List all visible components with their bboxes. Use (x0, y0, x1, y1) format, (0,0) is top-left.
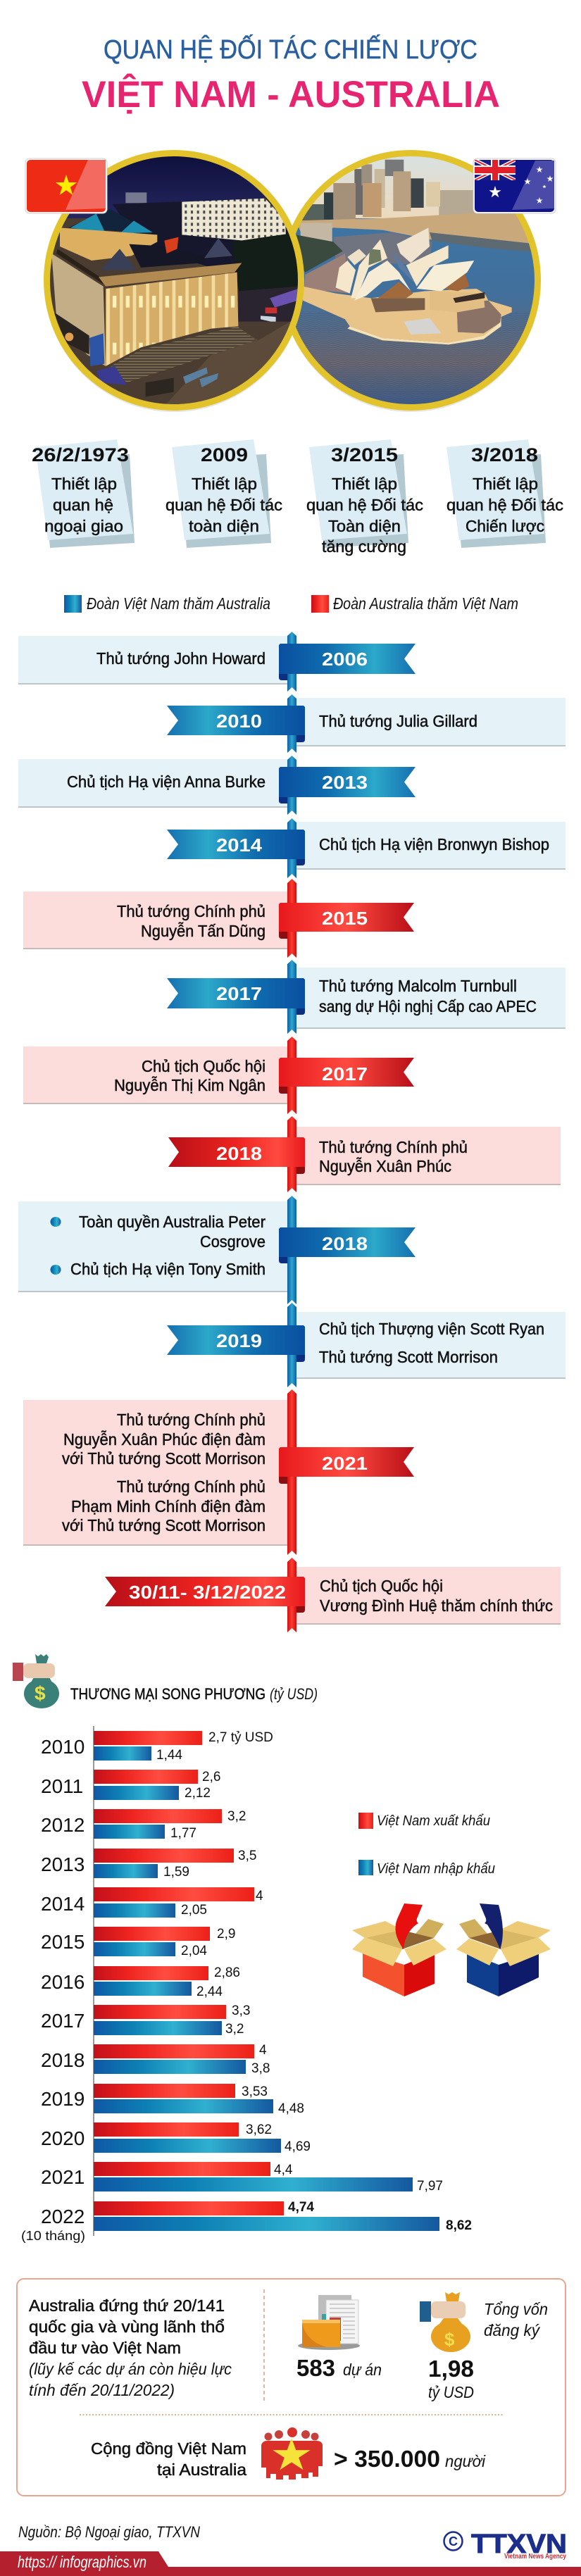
year 2019: 3,53 (242, 2084, 268, 2099)
year 2011: 2,6 (202, 1770, 220, 1784)
milestone: 26/2/1973: quan hệ (53, 496, 113, 514)
year 2020 (41, 2122, 311, 2154)
row: 2017 blue (167, 960, 566, 1034)
year 2018: 4 (259, 2043, 267, 2058)
year 2010: 2010 (41, 1736, 85, 1758)
year 2014: 4 (256, 1889, 263, 1903)
icon: export box (352, 1903, 446, 1996)
title: line 2: VIỆT NAM - AUSTRALIA (82, 73, 500, 115)
row: 2021: với Thủ tướng Scott Morrison (62, 1449, 265, 1468)
year 2011 (41, 1770, 220, 1801)
year 2015: 2,04 (181, 1944, 207, 1958)
milestone: 3/2015 (306, 439, 423, 556)
source note: Nguồn: Bộ Ngoại giao, TTXVN (18, 2523, 200, 2541)
photo: Hanoi Opera House in gold ring (42, 148, 304, 415)
investment text (29, 2296, 232, 2399)
row: 2018 blue: Cosgrove (200, 1232, 265, 1251)
icon: hand holding money bag: $ (35, 1682, 46, 1704)
year 2016: 2,86 (214, 1965, 240, 1980)
row: 2021: Phạm Minh Chính điện đàm (71, 1497, 265, 1515)
year 2020: 3,62 (246, 2122, 272, 2137)
row: 2021: với Thủ tướng Scott Morrison (62, 1516, 265, 1534)
row: 2018 red (168, 1116, 561, 1192)
year 2012 (41, 1809, 246, 1841)
row: 30/11-3/12/2022: Chủ tịch Quốc hội (320, 1577, 443, 1595)
row: 2014: Chủ tịch Hạ viện Bronwyn Bishop (319, 835, 549, 854)
year 2014 (41, 1887, 263, 1918)
icon: community people with star (261, 2427, 323, 2480)
milestone: 3/2015: quan hệ Đối tác (306, 496, 423, 514)
stat: registered capital: đăng ký (484, 2321, 540, 2339)
milestone: 3/2015: 3/2015 (331, 444, 398, 465)
year 2022: (10 tháng) (21, 2229, 85, 2243)
row: 2006: 2006 (322, 649, 368, 670)
milestone: 2009 (165, 439, 282, 548)
row: 2018 blue (18, 1196, 416, 1304)
row: 2015 (23, 879, 414, 958)
milestone: 3/2018: Thiết lập (473, 475, 538, 493)
year 2015 (41, 1927, 235, 1958)
year 2015: 2015 (41, 1931, 85, 1953)
row: 2017 blue: sang dự Hội nghị Cấp cao APEC (319, 997, 537, 1015)
investment text: đầu tư vào Việt Nam (29, 2339, 181, 2357)
logo: TTXVN: C (449, 2534, 458, 2549)
row: 2010 (167, 694, 566, 753)
title: line 1: QUAN HỆ ĐỐI TÁC CHIẾN LƯỢC (104, 33, 477, 65)
row: 2017 red: Chủ tịch Quốc hội (142, 1057, 265, 1075)
icon: project folder (298, 2295, 360, 2350)
milestone: 2009: 2009 (201, 444, 248, 465)
logo: TTXVN: TTXVN (471, 2530, 567, 2559)
stat: community size: > 350.000 (334, 2446, 440, 2472)
milestone: 26/2/1973 (32, 439, 135, 548)
row: 2021: Nguyễn Xuân Phúc điện đàm (63, 1430, 265, 1449)
legend: delegations (64, 594, 518, 613)
photo: Sydney Opera House in gold ring (281, 148, 547, 415)
row: 2013: 2013 (322, 772, 368, 793)
milestone: 2009: toàn diện (189, 517, 259, 535)
year 2018: 3,8 (251, 2061, 270, 2076)
year 2013: 2013 (41, 1853, 85, 1875)
year 2013 (41, 1849, 256, 1880)
year 2019: 2019 (41, 2088, 85, 2110)
year 2011: 2011 (41, 1775, 83, 1797)
stat: projects: dự án (343, 2361, 382, 2379)
milestone: 3/2015: tăng cường (322, 537, 406, 556)
year 2017 (41, 2003, 250, 2037)
row: 2006 (18, 632, 416, 692)
panel: investment and community (17, 2279, 566, 2496)
year 2017: 2017 (41, 2010, 85, 2032)
row: 2018 blue: Chủ tịch Hạ viện Tony Smith (70, 1260, 265, 1278)
footer bar with URL: https:// infographics.vn (18, 2553, 146, 2571)
row: 2017 red: Nguyễn Thị Kim Ngân (114, 1076, 265, 1094)
year 2018: 2018 (41, 2049, 85, 2071)
row: 2019 (167, 1303, 566, 1387)
icon: import box (456, 1903, 551, 1996)
year 2011: 2,12 (185, 1786, 211, 1801)
legend: trade: Việt Nam xuất khẩu (377, 1813, 490, 1829)
stat: registered capital: Tổng vốn (484, 2300, 548, 2318)
row: 2018 red: Nguyễn Xuân Phúc (319, 1157, 451, 1175)
year 2020: 2020 (41, 2127, 85, 2149)
legend: delegations: Đoàn Việt Nam thăm Australia (87, 594, 270, 613)
chart heading: (tỷ USD) (270, 1685, 318, 1703)
footer bar with URL (0, 2551, 581, 2576)
bar chart: bilateral trade (21, 1726, 472, 2243)
community label: Cộng đồng Việt Nam (91, 2439, 246, 2458)
row: 2015: 2015 (322, 908, 368, 929)
year 2017: 3,3 (232, 2003, 250, 2018)
stat: registered capital: 1,98 (428, 2356, 474, 2382)
row: 30/11-3/12/2022 (105, 1558, 561, 1632)
year 2016: 2016 (41, 1971, 85, 1993)
year 2016: 2,44 (196, 1984, 223, 1999)
year 2014: 2,05 (181, 1903, 207, 1918)
community label (91, 2439, 246, 2479)
logo: TTXVN: Vietnam News Agency (504, 2553, 566, 2561)
milestone: 2009: Thiết lập (192, 475, 257, 493)
row: 2010: Thủ tướng Julia Gillard (319, 712, 477, 730)
year 2012: 3,2 (227, 1809, 246, 1824)
milestone: 3/2015: Toàn diện (328, 517, 401, 535)
row: 2019: Chủ tịch Thượng viện Scott Ryan (319, 1320, 544, 1338)
row: 2006: Thủ tướng John Howard (96, 649, 265, 668)
row: 2021: 2021 (322, 1453, 368, 1474)
icon: Australia flag (473, 158, 556, 213)
stat: registered capital: tỷ USD (428, 2383, 474, 2401)
timeline (18, 632, 566, 1632)
icon: hand holding money bag (13, 1654, 59, 1708)
row: 2017 red: 2017 (322, 1063, 368, 1084)
milestone: 3/2018: 3/2018 (471, 444, 538, 465)
row: 2014 (167, 818, 566, 878)
icon: Vietnam flag (25, 158, 107, 213)
milestone: 3/2018: quan hệ Đối tác (446, 496, 563, 514)
milestone: 3/2015: Thiết lập (332, 475, 397, 493)
row: 2017 blue: 2017 (216, 983, 262, 1004)
year 2022: 2022 (41, 2206, 85, 2227)
year 2017: 3,2 (225, 2022, 244, 2037)
investment text: tính đến 20/11/2022) (29, 2381, 175, 2399)
row: 2018 blue: Toàn quyền Australia Peter (79, 1213, 265, 1231)
milestone: 2009: quan hệ Đối tác (165, 496, 282, 514)
legend: delegations: Đoàn Australia thăm Việt Nam (333, 594, 518, 613)
row: 2021: Thủ tướng Chính phủ (117, 1477, 265, 1496)
year 2012: 2012 (41, 1814, 85, 1836)
row: 2015: Thủ tướng Chính phủ (117, 902, 265, 920)
row: 2018 blue: 2018 (322, 1233, 368, 1254)
row: 2021 (23, 1389, 414, 1555)
milestone: 26/2/1973: ngoại giao (44, 517, 123, 535)
year 2016 (41, 1965, 240, 1999)
year 2013: 1,59 (163, 1865, 189, 1880)
investment text: Australia đứng thứ 20/141 (29, 2296, 225, 2315)
year 2022: 4,74 (288, 2200, 314, 2215)
investment text: (lũy kế các dự án còn hiệu lực (29, 2360, 232, 2378)
icon: hand with gold money bag (420, 2292, 470, 2352)
stat: projects: 583 (296, 2355, 335, 2381)
row: 2019: Thủ tướng Scott Morrison (319, 1348, 498, 1366)
logo: TTXVN (444, 2530, 567, 2561)
year 2021: 7,97 (417, 2179, 443, 2194)
year 2021 (41, 2162, 443, 2194)
year 2010: 2,7 tỷ USD (208, 1730, 273, 1745)
year 2013: 3,5 (238, 1849, 256, 1863)
row: 30/11-3/12/2022: Vương Đình Huệ thăm chính thức (320, 1596, 553, 1615)
year 2022: 8,62 (446, 2218, 472, 2233)
year 2021: 4,4 (274, 2163, 293, 2177)
year 2014: 2014 (41, 1893, 85, 1915)
year 2019: 4,48 (278, 2101, 304, 2116)
year 2021: 2021 (41, 2166, 85, 2188)
row: 2021: Thủ tướng Chính phủ (117, 1411, 265, 1429)
year 2019 (41, 2084, 304, 2116)
stat: registered capital (428, 2300, 548, 2401)
year 2010 (41, 1730, 273, 1763)
year 2022 (21, 2200, 472, 2243)
stat: community size: người (445, 2452, 486, 2470)
chart heading: THƯƠNG MẠI SONG PHƯƠNG (70, 1685, 265, 1703)
icon: hand with gold money bag: $ (444, 2329, 455, 2350)
row: 2013 (18, 756, 416, 815)
row: 2014: 2014 (216, 834, 263, 856)
row: 2017 red (23, 1037, 414, 1114)
year 2015: 2,9 (217, 1927, 235, 1942)
year 2012: 1,77 (170, 1826, 196, 1841)
stat: projects (296, 2355, 382, 2381)
milestone: 26/2/1973: Thiết lập (51, 475, 117, 493)
row: 30/11-3/12/2022: 30/11- 3/12/2022 (129, 1582, 286, 1603)
row: 2018 red: Thủ tướng Chính phủ (319, 1138, 468, 1156)
legend: trade (358, 1813, 495, 1877)
legend: trade: Việt Nam nhập khẩu (377, 1861, 495, 1877)
row: 2017 blue: Thủ tướng Malcolm Turnbull (319, 977, 517, 995)
row: 2013: Chủ tịch Hạ viện Anna Burke (67, 773, 265, 791)
milestone: 3/2018 (446, 439, 563, 548)
milestone: 26/2/1973: 26/2/1973 (32, 444, 129, 465)
row: 2010: 2010 (216, 711, 262, 732)
year 2010: 1,44 (156, 1748, 182, 1763)
row: 2018 red: 2018 (216, 1143, 262, 1164)
community label: tại Australia (157, 2461, 246, 2479)
year 2020: 4,69 (285, 2139, 311, 2154)
milestone: 3/2018: Chiến lược (466, 517, 544, 535)
row: 2015: Nguyễn Tấn Dũng (141, 922, 265, 940)
stat: community size (334, 2446, 486, 2472)
year 2018 (41, 2043, 270, 2076)
investment text: quốc gia và vùng lãnh thổ (29, 2318, 225, 2336)
row: 2019: 2019 (216, 1330, 262, 1351)
